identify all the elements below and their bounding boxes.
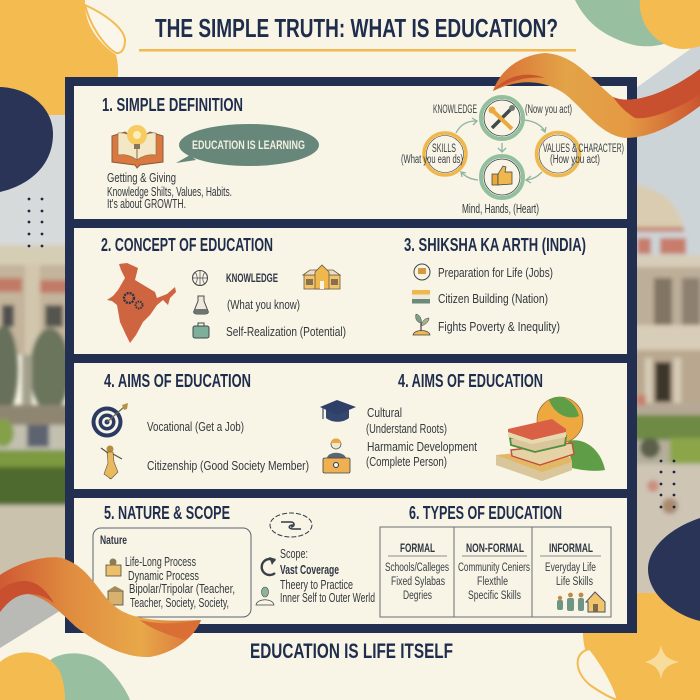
icon: globe [192,270,208,286]
heading: aims left: 4. AIMS OF EDUCATION [104,371,251,391]
text: definition: Knowledge Shilts, Values, Habits. [107,185,232,199]
table: types of education [380,527,611,617]
text: concept list: Self-Realization (Potential) [226,325,346,339]
decorative shape: top-left yellow blob [0,0,125,115]
text: concept list [226,271,346,339]
icon: person at laptop [323,438,350,473]
nature box: Bipolar/Tripolar (Teacher, [129,582,235,596]
column: formal: Degries [403,590,432,602]
decorative ribbon: bottom left [0,557,201,657]
icon: library [107,586,124,605]
text: scope: Scope: [280,547,308,561]
cycle arrows [456,118,546,183]
icon: people [256,587,274,605]
text: aims right: (Understand Roots) [366,422,447,436]
column: non-formal: NON-FORMAL [466,541,524,555]
diagram: knowledge skills values cycle [401,97,624,216]
nature box [93,528,251,617]
heading: types of education: 6. TYPES OF EDUCATION [409,503,562,523]
icon: briefcase [193,323,209,338]
icon: jobs [414,264,430,280]
text: aims right [366,406,477,469]
decorative ribbon: top right [493,53,700,138]
labels: cycle: KNOWLEDGE [433,104,477,116]
panel: nature, scope and types [74,498,627,624]
text: shiksha list: Fights Poverty & Inequlity) [438,320,560,334]
icon: flag [412,290,430,304]
icon: school building [303,265,340,289]
labels: cycle: (What you ean ds) [401,154,463,166]
nature box: Nature [100,533,127,547]
icon: book with light bulb [112,125,163,168]
labels: cycle: SKILLS [432,143,456,155]
icon: thumbs up circle [481,156,523,198]
column: non-formal [458,541,530,602]
icon: graduation box [106,558,121,576]
nature box: Dynamic Process [128,569,199,583]
icon: graduation cap [320,400,356,422]
labels: cycle: Mind, Hands, (Heart) [462,202,539,216]
icon: chain in dial [270,513,312,537]
labels: cycle: VALUES & CHARACTER) [543,143,624,155]
icon: yellow ring skills [424,133,466,175]
icon: dancer [101,446,122,479]
icon: flask [194,296,208,314]
column: non-formal: Specific Skills [468,590,521,602]
text: aims right: Harmamic Development [367,440,477,454]
heading: concept of education: 2. CONCEPT OF EDUCATION [101,235,273,255]
text: scope: Theery to Practice [280,578,353,592]
icon: yellow ring values [536,132,580,176]
labels: cycle: (How you act) [550,154,600,166]
icon: target with arrow [92,403,128,438]
decorative shape: bottom-left green and yellow blobs [0,652,130,700]
column: informal: Everyday Life [545,562,596,574]
text: definition: Getting & Giving [107,171,176,185]
decorative dots: right [660,460,675,508]
text: scope [280,547,375,605]
background photo: right side [637,46,700,594]
footer tagline: EDUCATION IS LIFE ITSELF [250,640,453,663]
column: informal [545,541,596,588]
speech bubble: EDUCATION IS LEARNING [192,138,305,152]
text: definition [107,171,232,211]
heading: aims right: 4. AIMS OF EDUCATION [398,371,543,391]
heading: shiksha ka arth: 3. SHIKSHA KA ARTH (INDIA) [404,235,586,255]
icon: map of India with gears [107,263,176,343]
column: informal: INFORMAL [549,541,593,555]
icon: refresh arrow [262,557,276,575]
background photo: left side [0,115,65,648]
icon: tools circle [481,97,523,139]
panel: simple definition [74,86,627,219]
text: definition: It's about GROWTH. [107,197,186,211]
decorative shape: bottom-right yellow and navy blobs [578,518,700,700]
column: formal: FORMAL [400,541,435,555]
heading: simple definition: 1. SIMPLE DEFINITION [102,95,243,115]
nature box: Teacher, Society, Society, [130,596,229,610]
text: scope: Inner Self to Outer Werld [280,591,375,605]
text: shiksha list: Citizen Building (Nation) [438,292,548,306]
labels: cycle: (Now you act) [525,104,572,116]
text: aims left: Vocational (Get a Job) [147,420,244,434]
column: formal [385,541,449,602]
text: concept list: (What you know) [227,298,300,312]
title: THE SIMPLE TRUTH: WHAT IS EDUCATION? [155,13,558,43]
column: non-formal: Flexthle [477,576,508,588]
main navy frame [65,77,637,633]
panel: concept of education [74,228,627,354]
text: aims left: Citizenship (Good Society Member) [147,459,309,473]
text: shiksha list [438,266,560,334]
text: aims right: Cultural [367,406,402,420]
column: non-formal: Community Ceniers [458,562,530,574]
text: aims left [147,420,309,473]
panel: aims of education [74,363,627,489]
column: formal: Schools/Calleges [385,562,449,574]
text: aims right: (Complete Person) [366,455,447,469]
heading: nature and scope: 5. NATURE & SCOPE [104,503,230,523]
labels: cycle [401,104,624,216]
speech bubble [176,124,319,166]
icon: family and house [557,592,605,612]
icon: sprout [413,314,430,335]
title underline [139,49,576,52]
text: concept list: KNOWLEDGE [226,271,278,285]
column: formal: Fixed Sylabas [391,576,445,588]
text: shiksha list: Preparation for Life (Jobs) [438,266,553,280]
decorative shape: left navy blob [0,87,53,192]
icon: stack of books with globe and leaf [496,397,605,481]
nature box: Life-Long Process [125,555,196,569]
decorative dots: left [28,198,43,247]
decorative shape: top-right green and yellow blobs [575,0,700,49]
text: scope: Vast Coverage [280,563,339,577]
column: informal: Life Skills [556,576,593,588]
